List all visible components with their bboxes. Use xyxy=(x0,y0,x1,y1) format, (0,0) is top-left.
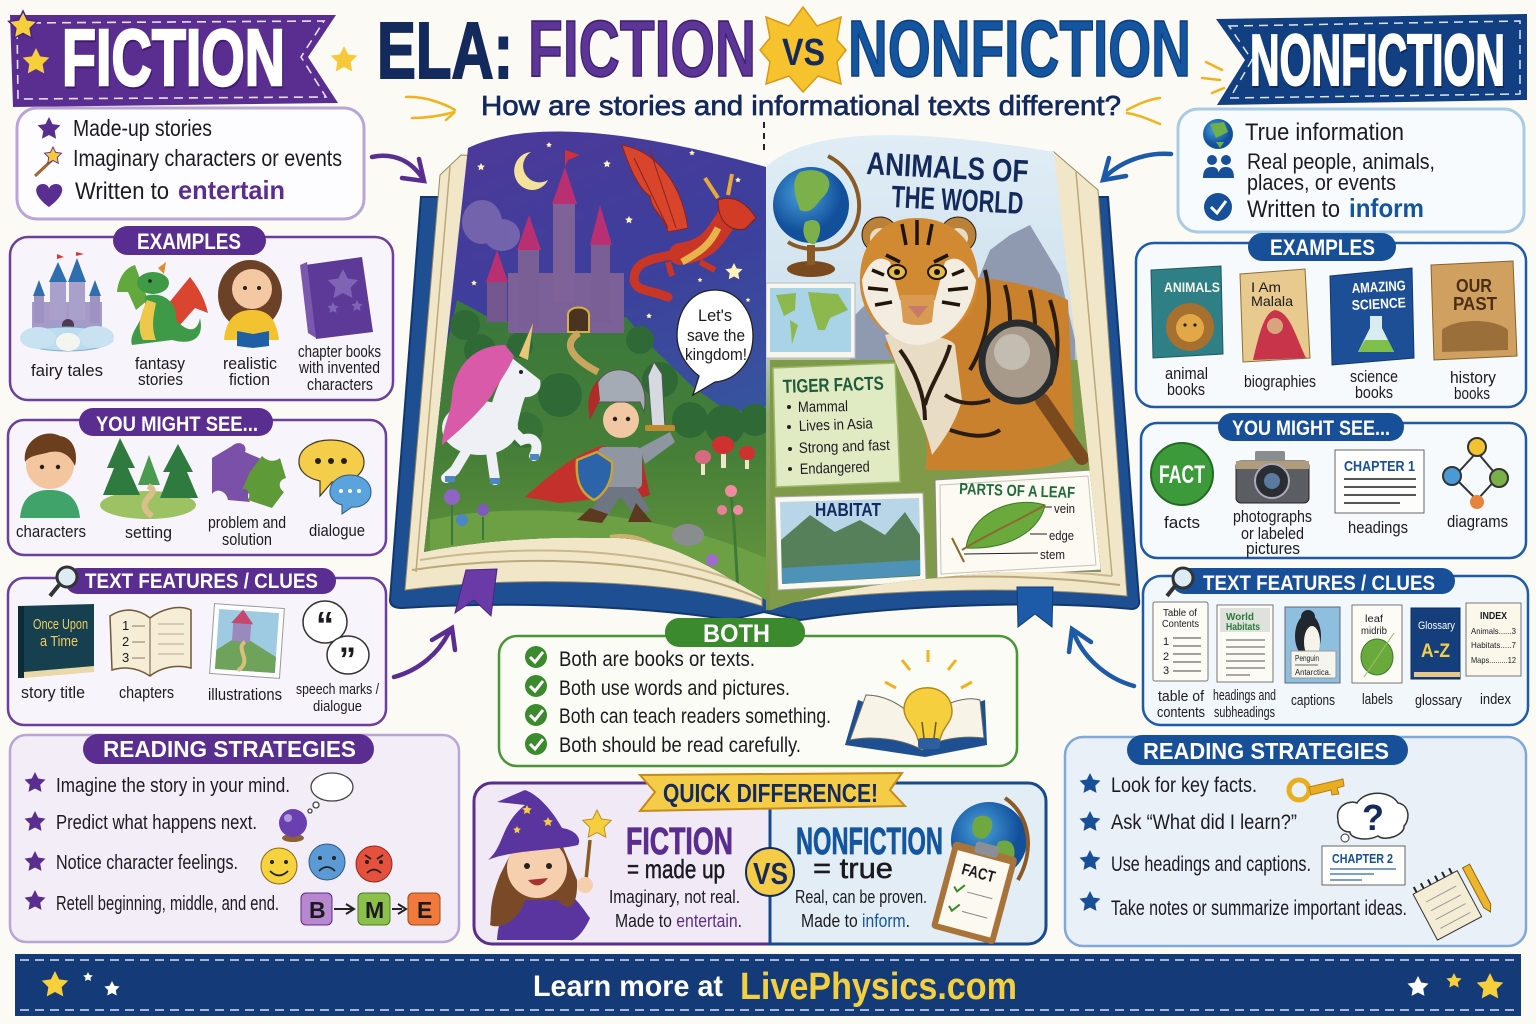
star decoration xyxy=(331,46,357,71)
icon: quotation bubbles: ” xyxy=(339,641,356,679)
VS starburst xyxy=(760,7,846,92)
winding path xyxy=(570,333,598,372)
icon: leaf label card: midrib xyxy=(1361,626,1387,637)
icon: thought cloud xyxy=(308,773,353,813)
footer stars xyxy=(42,971,1503,998)
strategy text xyxy=(1111,774,1407,920)
strategy text: Notice character feelings. xyxy=(56,852,238,874)
fiction definition box xyxy=(17,108,364,219)
icon: table of contents page: 1 xyxy=(1163,636,1169,648)
icon: feeling faces xyxy=(261,844,392,884)
icon: I Am Malala book xyxy=(1240,269,1310,362)
knight with sword and shield xyxy=(525,362,675,523)
panel: fiction you might see xyxy=(8,408,386,555)
icon: leaf label card xyxy=(1352,605,1402,683)
inform word: inform xyxy=(1349,193,1424,223)
icon: penguin photo: Antarctica. xyxy=(1295,668,1331,677)
panel: fiction reading strategies xyxy=(10,734,459,942)
icon: index page xyxy=(1466,603,1521,676)
both list text: Both are books or texts. xyxy=(559,648,755,671)
right page nonfiction scene xyxy=(764,120,1109,610)
nonfiction summary text: NONFICTION xyxy=(796,821,943,863)
icon: chapter one card: CHAPTER 1 xyxy=(1344,458,1415,475)
icon: beginning middle end boxes: E xyxy=(417,897,432,923)
icon: I Am Malala book: Malala xyxy=(1251,293,1293,309)
icon: heart xyxy=(36,184,62,207)
main title: NONFICTION xyxy=(848,4,1191,93)
speech bubble: save the xyxy=(687,326,745,345)
icon: boy character xyxy=(20,434,80,518)
icon: camera xyxy=(1236,451,1309,503)
examples heading pill: EXAMPLES xyxy=(137,229,241,254)
icon: chapters open book xyxy=(110,608,191,676)
strategy stars xyxy=(25,772,45,910)
example labels xyxy=(31,342,381,394)
example labels: science xyxy=(1350,367,1398,386)
book cover xyxy=(390,197,1139,620)
blue bookmark xyxy=(1017,587,1053,627)
panel: fiction examples xyxy=(10,226,393,400)
icon: amazing science book: SCIENCE xyxy=(1351,294,1406,313)
icon: chapters open book: 2 xyxy=(122,634,129,649)
text feature labels: chapters xyxy=(119,683,174,702)
icon: glossary book xyxy=(1411,608,1460,679)
icon: index page: Animals......3 xyxy=(1471,626,1516,636)
real people text: places, or events xyxy=(1247,170,1396,195)
icon: fact badge: FACT xyxy=(1159,461,1205,489)
icon: question thought cloud: ? xyxy=(1362,797,1384,838)
you might see labels: headings xyxy=(1348,518,1408,537)
left page fantasy scene xyxy=(420,120,771,610)
text feature labels: speech marks / xyxy=(296,681,380,698)
example labels: realistic xyxy=(223,354,277,373)
icon: animals book xyxy=(1151,266,1223,358)
icon: table of contents page: Contents xyxy=(1162,619,1199,630)
learn more text: Learn more at xyxy=(533,970,723,1003)
icon: girl reading xyxy=(218,260,282,348)
example labels: fantasy xyxy=(135,354,185,373)
world map card xyxy=(766,283,855,358)
text feature labels xyxy=(1157,687,1511,721)
text feature labels: index xyxy=(1480,691,1511,708)
both list text: Both should be read carefully. xyxy=(559,734,801,757)
text feature labels: table of xyxy=(1158,688,1205,705)
text features heading pill: TEXT FEATURES / CLUES xyxy=(1203,572,1435,595)
you might see labels: problem and xyxy=(208,513,286,532)
nonfiction half xyxy=(770,783,1046,944)
parts of a leaf card xyxy=(935,470,1101,580)
icon: glossary book: A-Z xyxy=(1421,641,1450,662)
icon: castle on clouds xyxy=(20,252,114,351)
purple bookmark xyxy=(455,569,497,616)
habitat picture xyxy=(775,493,926,590)
text feature labels xyxy=(21,681,380,715)
icon: fact badge xyxy=(1151,443,1213,505)
website text: LivePhysics.com xyxy=(740,966,1017,1008)
quick difference banner xyxy=(640,773,905,811)
open book illustration xyxy=(390,120,1139,627)
arrow: nonfiction features to book xyxy=(1069,629,1134,686)
icon: animals book: ANIMALS xyxy=(1164,279,1220,295)
icon: magnifier xyxy=(50,567,77,596)
arrow: fiction features to book xyxy=(394,628,455,677)
you might see labels: pictures xyxy=(1246,539,1300,558)
book title: THE WORLD xyxy=(891,179,1024,221)
imaginary text: Imaginary characters or events xyxy=(73,145,342,171)
unicorn xyxy=(442,323,541,484)
you might see labels: solution xyxy=(222,530,272,549)
both list text: Both can teach readers something. xyxy=(559,705,831,728)
desk globe xyxy=(773,156,859,277)
example labels: books xyxy=(1454,384,1490,403)
fiction summary text xyxy=(609,821,742,931)
example labels: history xyxy=(1450,368,1496,387)
icon: penguin photo: Penguin xyxy=(1295,654,1319,663)
panel: nonfiction examples xyxy=(1136,233,1526,407)
crescent moon xyxy=(514,152,548,190)
red flying dragon xyxy=(622,145,756,297)
forest clumps xyxy=(450,310,771,448)
icon: world habitats page: Habitats xyxy=(1226,622,1260,633)
example labels: biographies xyxy=(1244,372,1316,391)
text feature labels: illustrations xyxy=(208,685,282,704)
icon: chapter two card: CHAPTER 2 xyxy=(1332,851,1393,866)
violet clouds xyxy=(462,200,520,251)
example labels: animal xyxy=(1165,364,1208,383)
icon: quotation bubbles xyxy=(303,601,369,679)
magnifying glass xyxy=(982,323,1082,458)
icon: chapters open book: 1 xyxy=(122,618,129,633)
icon: index page: Habitats.....7 xyxy=(1471,640,1516,650)
icon: crystal ball xyxy=(279,809,307,842)
icon: notepad and pencil xyxy=(1410,859,1494,940)
check icons xyxy=(525,646,547,755)
arrow: fiction definition to book xyxy=(372,156,424,181)
speech bubble xyxy=(677,290,753,395)
strategy text xyxy=(56,775,290,915)
quick difference banner: QUICK DIFFERENCE! xyxy=(663,778,878,808)
stars in the sky xyxy=(471,142,750,318)
icon: penguin photo xyxy=(1285,607,1340,683)
nonfiction definition box xyxy=(1178,109,1524,232)
icon: amazing science book xyxy=(1330,268,1414,365)
fiction summary text: FICTION xyxy=(626,821,733,863)
icon: illustration picture xyxy=(210,604,284,678)
text feature labels: subheadings xyxy=(1214,704,1275,721)
icon: earth xyxy=(1203,119,1233,149)
you might see heading pill: YOU MIGHT SEE... xyxy=(1232,417,1390,440)
wizard girl xyxy=(488,790,611,940)
icon: world habitats page: World xyxy=(1226,612,1254,623)
fiction ribbon banner xyxy=(9,11,338,107)
icon: chapter two card xyxy=(1322,846,1405,885)
example labels: stories xyxy=(138,370,183,389)
icon: people xyxy=(1203,155,1234,178)
main title: FICTION xyxy=(528,4,756,93)
you might see labels xyxy=(16,513,365,549)
icon: beginning middle end boxes: B xyxy=(309,897,326,923)
strategy text: Imagine the story in your mind. xyxy=(56,775,290,797)
example labels xyxy=(1165,364,1496,403)
icon: table of contents page: Table of xyxy=(1163,608,1197,619)
accent lines xyxy=(406,62,1224,124)
tiger facts note: TIGER FACTS xyxy=(782,373,884,398)
both heading pill xyxy=(665,618,805,648)
icon: book with lightbulb xyxy=(845,650,987,757)
reading strategies heading pill: READING STRATEGIES xyxy=(103,736,356,762)
icon: once upon a time book: Once Upon xyxy=(33,616,88,633)
icon: our past book: OUR xyxy=(1456,276,1492,296)
fiction ribbon banner: FICTION xyxy=(62,13,285,102)
icon: glossary book: Glossary xyxy=(1418,620,1455,632)
spine dashed line xyxy=(763,122,765,152)
you might see labels: diagrams xyxy=(1447,512,1508,531)
icon: our past book xyxy=(1431,261,1517,360)
icon: question thought cloud xyxy=(1338,793,1408,842)
parts of a leaf card: vein xyxy=(1054,501,1075,516)
example labels: books xyxy=(1355,383,1393,402)
tiger facts note xyxy=(773,363,900,487)
speech bubble: kingdom! xyxy=(685,345,747,364)
example labels: chapter books xyxy=(298,342,381,361)
you might see labels: or labeled xyxy=(1241,524,1304,543)
footer banner xyxy=(15,954,1521,1016)
mushrooms and flowers xyxy=(444,436,755,590)
parts of a leaf card: stem xyxy=(1040,547,1065,562)
examples heading pill xyxy=(113,226,266,255)
icon: our past book: PAST xyxy=(1453,294,1497,314)
both list text xyxy=(559,648,831,757)
icon: once upon a time book: a Time xyxy=(40,633,78,650)
icon: I Am Malala book: I Am xyxy=(1251,279,1281,295)
example labels: fiction xyxy=(229,370,270,389)
icon: forest setting xyxy=(100,438,198,519)
strategy text: Ask “What did I learn?” xyxy=(1111,811,1297,834)
you might see labels: facts xyxy=(1164,513,1200,532)
fact clipboard: FACT xyxy=(960,861,997,886)
castle xyxy=(486,150,624,333)
VS circle xyxy=(746,848,794,896)
tiger facts note: Mammal xyxy=(798,398,848,416)
icon: table of contents page xyxy=(1153,602,1208,681)
text features heading pill: TEXT FEATURES / CLUES xyxy=(85,570,318,593)
icon: purple chapter book xyxy=(300,257,373,339)
nonfiction summary text: = true xyxy=(813,853,893,885)
panel: fiction text features xyxy=(8,567,386,725)
real people text xyxy=(1247,149,1435,195)
reading strategies heading pill: READING STRATEGIES xyxy=(1143,738,1389,764)
icon: diagram nodes xyxy=(1443,438,1508,509)
icon: green dragon xyxy=(117,262,208,345)
icon: wand xyxy=(35,147,62,176)
you might see labels xyxy=(1164,507,1508,558)
example labels: with invented xyxy=(298,358,380,377)
icon: magnifier xyxy=(1167,568,1193,596)
example labels: fairy tales xyxy=(31,361,103,380)
main title xyxy=(377,4,1191,95)
icon: leaf label card: leaf xyxy=(1365,614,1383,625)
speech bubble: Let's xyxy=(698,306,732,325)
panel: nonfiction text features xyxy=(1143,568,1528,725)
both heading pill: BOTH xyxy=(703,620,770,648)
icon: beginning middle end boxes xyxy=(301,893,440,925)
icon: blue check xyxy=(1204,193,1232,221)
text feature labels: story title xyxy=(21,683,85,702)
strategy text: Predict what happens next. xyxy=(56,812,257,834)
icon: gold key xyxy=(1289,779,1344,800)
panel: nonfiction you might see xyxy=(1141,413,1526,558)
icon: chapters open book: 3 xyxy=(122,650,129,665)
written to text: Written to xyxy=(75,178,169,205)
panel: quick difference xyxy=(474,773,1046,945)
fiction half xyxy=(474,783,772,944)
strategy stars xyxy=(1080,773,1100,911)
text feature labels: captions xyxy=(1291,692,1335,709)
text feature labels: labels xyxy=(1362,691,1393,708)
small globe xyxy=(951,798,1028,880)
fact clipboard xyxy=(931,835,1019,945)
VS starburst: VS xyxy=(782,32,825,74)
you might see labels: setting xyxy=(125,523,172,542)
icon: star xyxy=(38,117,60,139)
habitat picture: HABITAT xyxy=(815,500,881,520)
text feature labels: headings and xyxy=(1213,687,1276,704)
parts of a leaf card: edge xyxy=(1049,528,1074,543)
text feature labels: glossary xyxy=(1415,692,1462,709)
parts of a leaf card: PARTS OF A LEAF xyxy=(959,481,1076,502)
tiger xyxy=(860,217,1075,470)
main title: ELA: xyxy=(377,6,513,95)
fiction summary text: Made to entertain. xyxy=(615,911,742,931)
panel: nonfiction reading strategies xyxy=(1065,735,1526,946)
icon: index page: Maps.........12 xyxy=(1471,655,1516,665)
page stacks xyxy=(405,152,1127,606)
example labels: books xyxy=(1167,380,1205,399)
tiger facts note: Strong and fast xyxy=(799,437,891,457)
VS circle: VS xyxy=(753,856,788,891)
icon: beginning middle end boxes: M xyxy=(365,897,384,923)
tiger facts note: Lives in Asia xyxy=(799,415,874,435)
strategy text: Look for key facts. xyxy=(1111,774,1257,797)
icon: puzzle pieces xyxy=(212,443,286,508)
panel: both xyxy=(499,618,1017,766)
example labels: characters xyxy=(307,375,373,394)
fiction summary text: Imaginary, not real. xyxy=(609,887,740,907)
icon: amazing science book: AMAZING xyxy=(1351,277,1406,296)
nonfiction summary text: Made to inform. xyxy=(801,911,910,931)
fiction summary text: = made up xyxy=(627,854,725,884)
made-up text: Made-up stories xyxy=(73,115,212,141)
you might see heading pill: YOU MIGHT SEE... xyxy=(96,413,258,436)
book title xyxy=(866,152,1028,214)
icon: once upon a time book xyxy=(18,604,94,678)
text feature labels: dialogue xyxy=(313,698,362,715)
real people text: Real people, animals, xyxy=(1247,149,1435,174)
true information text: True information xyxy=(1245,119,1404,146)
you might see labels: characters xyxy=(16,522,86,541)
icon: world habitats page xyxy=(1217,605,1273,682)
nonfiction summary text xyxy=(795,821,943,931)
green hills xyxy=(420,300,770,610)
written to text: Written to xyxy=(1247,196,1340,223)
strategy text: Use headings and captions. xyxy=(1111,853,1311,876)
icon: table of contents page: 2 xyxy=(1163,651,1169,663)
icon: speech bubbles xyxy=(299,440,371,514)
icon: quotation bubbles: “ xyxy=(316,604,334,645)
book title: ANIMALS OF xyxy=(866,145,1029,189)
you might see labels: dialogue xyxy=(309,521,365,540)
text feature labels: contents xyxy=(1157,704,1205,721)
examples heading pill: EXAMPLES xyxy=(1270,235,1375,260)
nonfiction summary text: Real, can be proven. xyxy=(795,887,927,907)
entertain word: entertain xyxy=(178,175,285,205)
both list text: Both use words and pictures. xyxy=(559,677,790,700)
strategy text: Take notes or summarize important ideas. xyxy=(1111,897,1407,920)
icon: index page: INDEX xyxy=(1480,611,1507,622)
you might see labels: photographs xyxy=(1233,507,1312,526)
strategy text: Retell beginning, middle, and end. xyxy=(56,893,279,915)
arrow: nonfiction definition to book xyxy=(1103,154,1171,180)
tiger facts note: Endangered xyxy=(800,459,870,478)
subtitle: How are stories and informational texts different? xyxy=(481,90,1121,121)
icon: table of contents page: 3 xyxy=(1163,665,1169,677)
icon: chapter one card xyxy=(1335,450,1424,513)
